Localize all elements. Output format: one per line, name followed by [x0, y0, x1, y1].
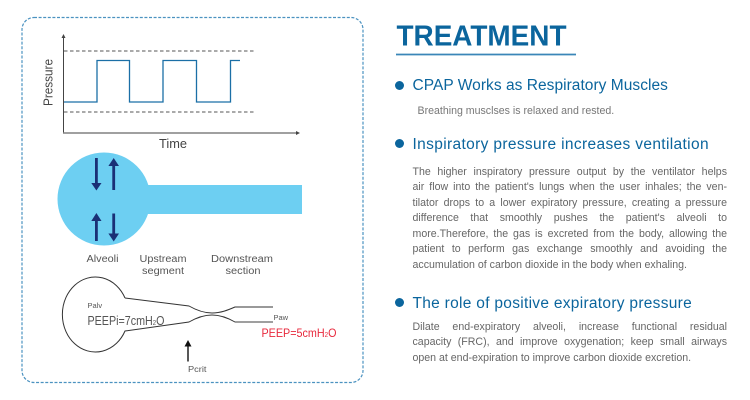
diagram: alveoli airflow: section — [226, 266, 260, 277]
diagram: alveoli airflow: Upstream — [140, 254, 186, 265]
chart: pressure over time — [42, 34, 300, 151]
text: CPAP body: Breathing musclses is relaxed and rested. — [418, 104, 614, 116]
text: inspiratory body: The higher inspiratory pressure output by the ventilator helps — [412, 166, 727, 178]
diagram: alveoli airflow: Alveoli — [86, 254, 118, 265]
diagram: airway pressure: Pcrit — [188, 365, 207, 374]
heading: inspiratory pressure: Inspiratory pressure increases ventilation — [412, 136, 709, 153]
diagram: airway pressure: PEEPi=7cmH2O — [88, 314, 165, 328]
diagram: airway pressure — [62, 277, 336, 374]
diagram: airway pressure: Palv — [88, 301, 102, 310]
text: positive expiratory body — [412, 320, 727, 364]
icon: airflow arrows — [91, 158, 119, 242]
text: inspiratory body: more.Therefore, the gas is excreted from the body, allowing the — [412, 228, 727, 240]
arrow: Pcrit — [184, 340, 192, 362]
chart: pressure over time: Time — [159, 137, 187, 151]
heading: positive expiratory pressure: The role of positive expiratory pressure — [412, 295, 692, 312]
heading: CPAP: CPAP Works as Respiratory Muscles — [412, 77, 668, 94]
diagram: alveoli airflow: Downstream — [211, 254, 273, 265]
text: positive expiratory body: Dilate end-expiratory alveoli, increase functional residual — [412, 320, 727, 332]
icon: bullet 1 — [395, 80, 404, 90]
text: inspiratory body: air flow into the patient's lungs when the user inhales; the ven- — [412, 181, 727, 193]
diagram: airway pressure: PEEP=5cmH2O — [262, 326, 336, 340]
text: inspiratory body: patient to perform gas exchange smoothly and avoiding the — [412, 243, 727, 255]
text: inspiratory body: accumulation of carbon dioxide in the body when exhaling. — [412, 259, 687, 271]
icon: bullet 2 — [395, 139, 404, 148]
diagram: alveoli airflow — [58, 152, 302, 277]
text: positive expiratory body: capacity (FRC), and improve oxygenation; keep small airways — [412, 336, 727, 348]
text: inspiratory body — [412, 166, 727, 271]
text: positive expiratory body: open at end-expiration to improve carbon dioxide excretion. — [412, 352, 691, 364]
text: inspiratory body: tilator drops to a lower expiratory pressure, creating a pressure — [412, 197, 727, 209]
diagram: alveoli airflow: segment — [142, 266, 184, 277]
text: inspiratory body: difference that smoothly pushes the patient's alveoli to — [412, 212, 727, 224]
chart: pressure over time: Pressure — [42, 59, 56, 106]
icon: bullet 3 — [395, 298, 404, 307]
diagram: airway pressure: Paw — [274, 313, 289, 322]
title: TREATMENT — [396, 20, 567, 52]
